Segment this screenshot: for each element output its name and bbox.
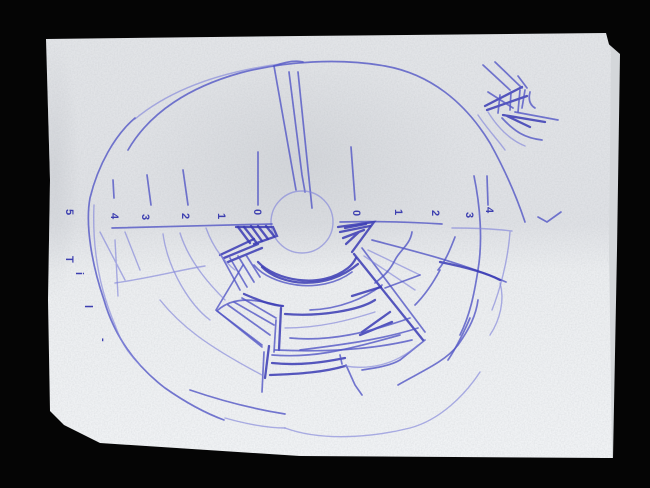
scale labels right: 4 xyxy=(483,207,495,214)
scale labels right xyxy=(350,207,495,218)
paper shading xyxy=(48,100,364,229)
side margin notes: T xyxy=(63,256,75,263)
scale labels left xyxy=(63,209,263,220)
side margin notes: - xyxy=(97,338,109,342)
scale labels right: 1 xyxy=(392,209,404,215)
arrow fletching top right xyxy=(478,62,558,150)
outer rim arcs xyxy=(88,62,525,437)
scale labels left: 1 xyxy=(215,213,227,219)
third arc band xyxy=(275,312,425,370)
check mark label for scale 5 xyxy=(538,212,561,222)
scale labels left: 2 xyxy=(179,213,191,219)
scale labels right: 0 xyxy=(350,210,362,216)
scale labels right: 3 xyxy=(463,212,475,218)
lower outer stroke xyxy=(225,418,285,428)
scale labels left: 0 xyxy=(251,209,263,215)
scale labels left: 4 xyxy=(108,213,120,220)
left lower field strokes xyxy=(100,228,262,375)
napkin back layer xyxy=(600,40,620,458)
check mark label for scale 5: 5 xyxy=(538,213,550,219)
diagram xyxy=(63,61,561,437)
lower segment verticals xyxy=(262,308,281,392)
napkin sheet xyxy=(46,33,612,458)
scale labels left: 5 xyxy=(63,209,75,215)
paper grain xyxy=(46,33,612,458)
scale baseline xyxy=(112,222,512,231)
left scale fan hatching xyxy=(220,226,277,290)
central hub circle xyxy=(271,191,333,253)
pointer stem xyxy=(274,61,312,208)
scale labels right: 2 xyxy=(429,210,441,216)
scale ticks xyxy=(113,147,488,205)
lower double band xyxy=(270,335,418,395)
scale labels left: 3 xyxy=(139,214,151,220)
second arc band xyxy=(216,265,382,347)
inner arc band xyxy=(254,258,358,286)
right lower field strokes xyxy=(375,232,502,360)
sketch on napkin xyxy=(46,33,620,458)
side margin notes: i xyxy=(73,272,85,275)
side margin notes xyxy=(63,256,109,342)
right scale fan hatching xyxy=(338,222,506,340)
side margin notes: l xyxy=(82,305,94,308)
